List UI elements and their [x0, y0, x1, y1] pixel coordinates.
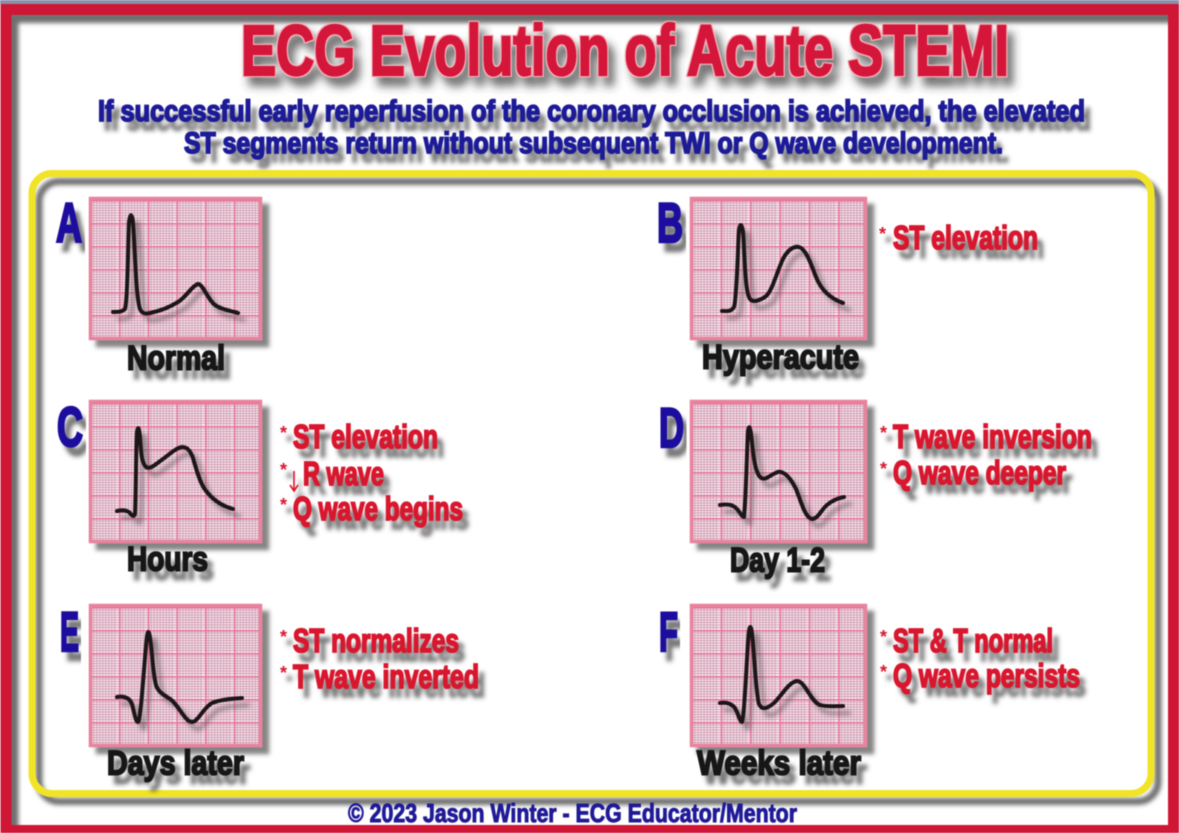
notes C: * — [280, 423, 287, 443]
panel B: hyperacute — [657, 191, 1038, 376]
notes E: ST normalizes — [293, 622, 459, 659]
notes C: R wave — [303, 455, 384, 492]
yellow content frame — [32, 174, 1151, 794]
caption A: Normal — [127, 340, 225, 378]
trace E — [117, 632, 242, 722]
notes F: * — [880, 627, 887, 647]
subtitle: ST segments return without subsequent TWI or Q wave development. — [184, 127, 1003, 160]
caption E: Days later — [107, 744, 244, 782]
notes D — [880, 418, 1092, 491]
notes C: * — [280, 495, 287, 515]
letter B: B — [657, 191, 683, 254]
notes C: ST elevation — [293, 418, 438, 455]
ECG grid B — [692, 198, 865, 338]
panel E: days later — [60, 600, 479, 782]
notes D: * — [880, 459, 887, 479]
notes F: * — [880, 662, 887, 682]
notes C: Q wave begins — [293, 490, 463, 527]
notes D: * — [880, 423, 887, 443]
subtitle — [98, 95, 1085, 160]
ECG grid C — [90, 402, 260, 542]
caption F: Weeks later — [697, 744, 861, 782]
letter C: C — [57, 395, 83, 458]
caption D: Day 1-2 — [730, 542, 825, 580]
trace D — [720, 427, 844, 519]
ECG grid A — [90, 198, 260, 338]
notes F: Q wave persists — [893, 657, 1080, 694]
panel C: hours — [57, 395, 463, 578]
notes B: * — [879, 224, 886, 244]
trace B — [722, 225, 843, 311]
notes E: * — [280, 627, 287, 647]
ECG grid F — [692, 606, 865, 746]
notes C — [280, 418, 463, 527]
notes F: ST & T normal — [893, 622, 1053, 659]
trace C — [117, 428, 233, 516]
caption C: Hours — [127, 540, 208, 578]
letter E: E — [60, 600, 79, 663]
notes B: ST elevation — [893, 219, 1038, 256]
panel D: day 1-2 — [659, 396, 1092, 580]
caption B: Hyperacute — [702, 338, 859, 376]
ECG grid D — [692, 402, 865, 542]
notes F — [880, 622, 1080, 694]
notes D: T wave inversion — [893, 418, 1092, 455]
notes D: Q wave deeper — [893, 454, 1066, 491]
trace A — [113, 215, 238, 314]
notes E: * — [280, 663, 287, 683]
panel F: weeks later — [659, 600, 1080, 782]
notes C: * — [280, 460, 287, 480]
notes E — [280, 622, 479, 695]
footer credit: © 2023 Jason Winter - ECG Educator/Mentor — [348, 798, 797, 828]
icon: down arrow — [290, 471, 298, 491]
ECG grid E — [90, 606, 260, 746]
panel A: normal — [56, 191, 260, 378]
letter D: D — [659, 396, 684, 459]
notes B — [879, 219, 1038, 256]
trace F — [720, 627, 843, 722]
notes E: T wave inverted — [293, 658, 479, 695]
letter A: A — [56, 191, 82, 254]
letter F: F — [659, 600, 678, 663]
